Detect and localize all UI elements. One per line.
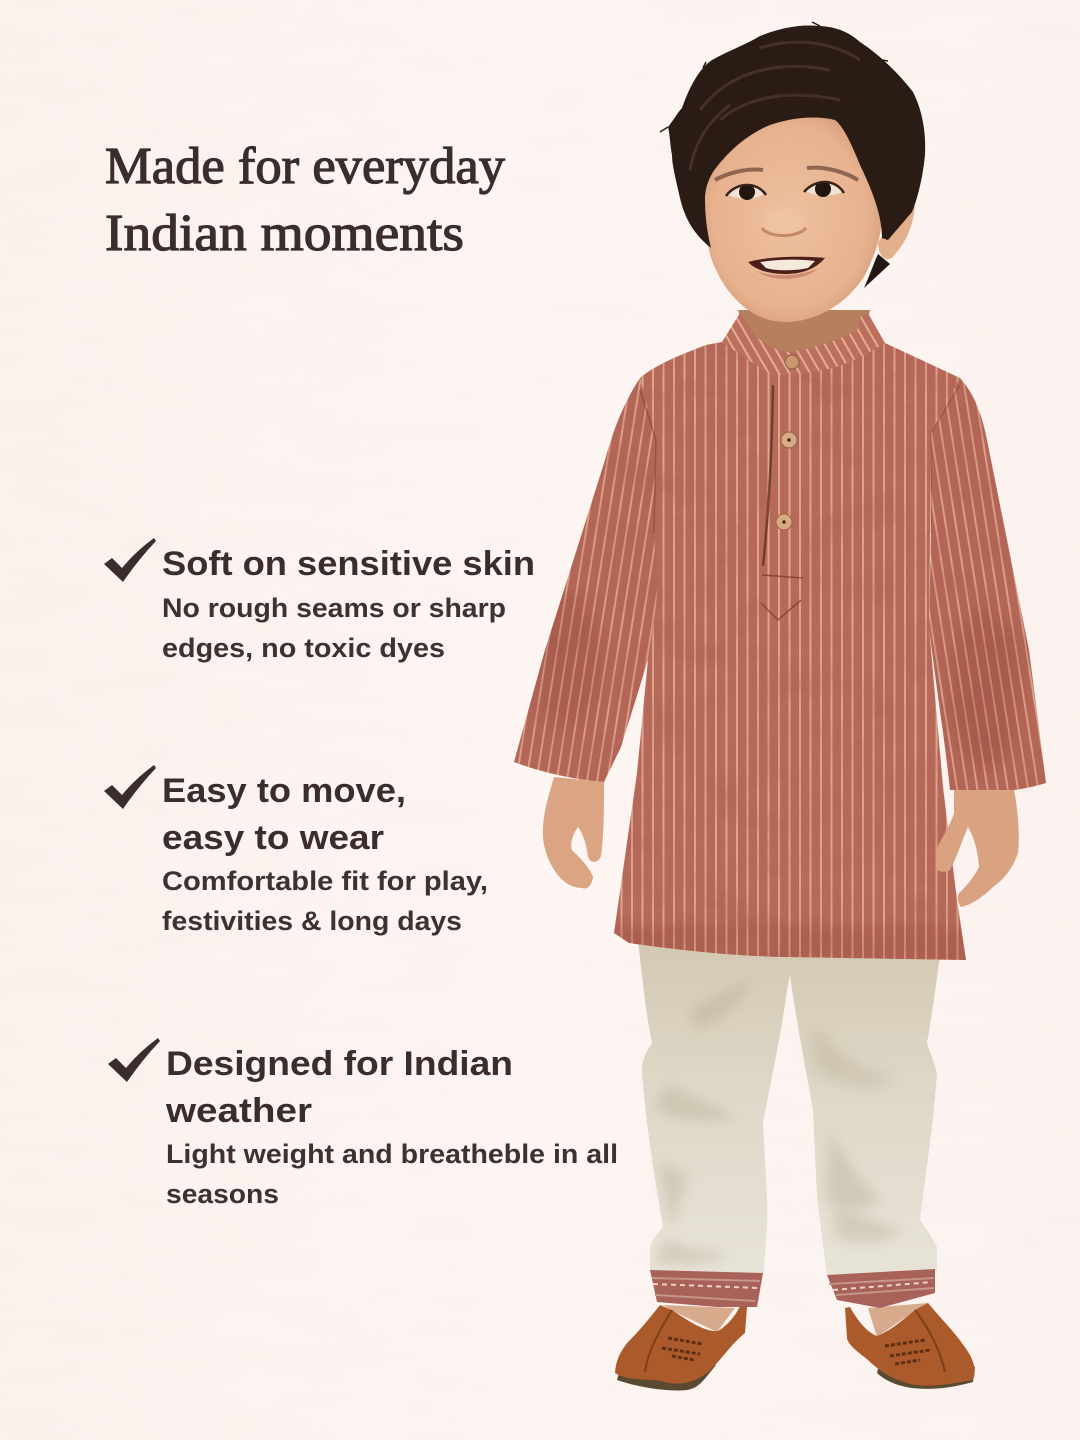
heading: designed for Indian weather: weather xyxy=(165,1092,312,1130)
collar xyxy=(722,313,885,375)
heading: designed for Indian weather xyxy=(165,1045,513,1130)
head xyxy=(660,22,925,322)
body xyxy=(614,342,966,960)
left sleeve xyxy=(514,378,657,782)
nose xyxy=(762,209,806,236)
description: designed for Indian weather: seasons xyxy=(166,1179,279,1209)
benefit: soft on sensitive skin xyxy=(104,538,535,663)
buttons xyxy=(776,355,799,530)
face xyxy=(705,113,882,322)
placket xyxy=(761,377,812,620)
hair xyxy=(660,22,925,248)
fabric folds xyxy=(655,980,905,1264)
icon: check mark xyxy=(104,765,156,809)
kurta xyxy=(500,310,1060,970)
neck xyxy=(738,310,870,372)
benefit: easy to move xyxy=(104,765,488,936)
illustration: smiling boy in kurta xyxy=(500,22,1060,1391)
description: soft on sensitive skin xyxy=(162,593,506,663)
trouser cuffs xyxy=(650,1269,935,1308)
title: Indian moments xyxy=(105,205,464,262)
heading: easy to move, easy to wear: easy to wear xyxy=(162,819,384,857)
description: designed for Indian weather xyxy=(166,1139,618,1209)
hand left xyxy=(543,777,604,888)
heading: soft on sensitive skin: Soft on sensitive skin xyxy=(162,545,535,583)
fabric mottling xyxy=(521,342,1038,960)
title xyxy=(105,138,505,262)
heading: easy to move, easy to wear: Easy to move, xyxy=(162,772,406,810)
description: soft on sensitive skin: edges, no toxic dyes xyxy=(162,633,445,663)
ear xyxy=(878,206,915,259)
icon: check mark xyxy=(108,1038,160,1082)
shoes xyxy=(615,1303,975,1391)
eyes xyxy=(726,181,844,200)
heading: designed for Indian weather: Designed for Indian xyxy=(166,1045,513,1083)
smile xyxy=(748,257,825,279)
description: easy to move xyxy=(162,866,488,936)
eyebrows xyxy=(715,168,858,180)
description: easy to move: Comfortable fit for play, xyxy=(162,866,488,896)
icon: check mark xyxy=(104,538,156,582)
description: soft on sensitive skin: No rough seams or sharp xyxy=(162,593,506,623)
description: easy to move: festivities & long days xyxy=(162,906,462,936)
description: designed for Indian weather: Light weight and breatheble in all xyxy=(166,1139,618,1169)
back hair xyxy=(864,254,890,288)
title: Made for everyday xyxy=(105,138,505,195)
heading: easy to move, easy to wear xyxy=(162,772,406,857)
benefit: designed for Indian weather xyxy=(108,1038,618,1209)
trousers xyxy=(638,940,940,1277)
right sleeve xyxy=(929,378,1046,790)
hand right xyxy=(936,790,1019,907)
